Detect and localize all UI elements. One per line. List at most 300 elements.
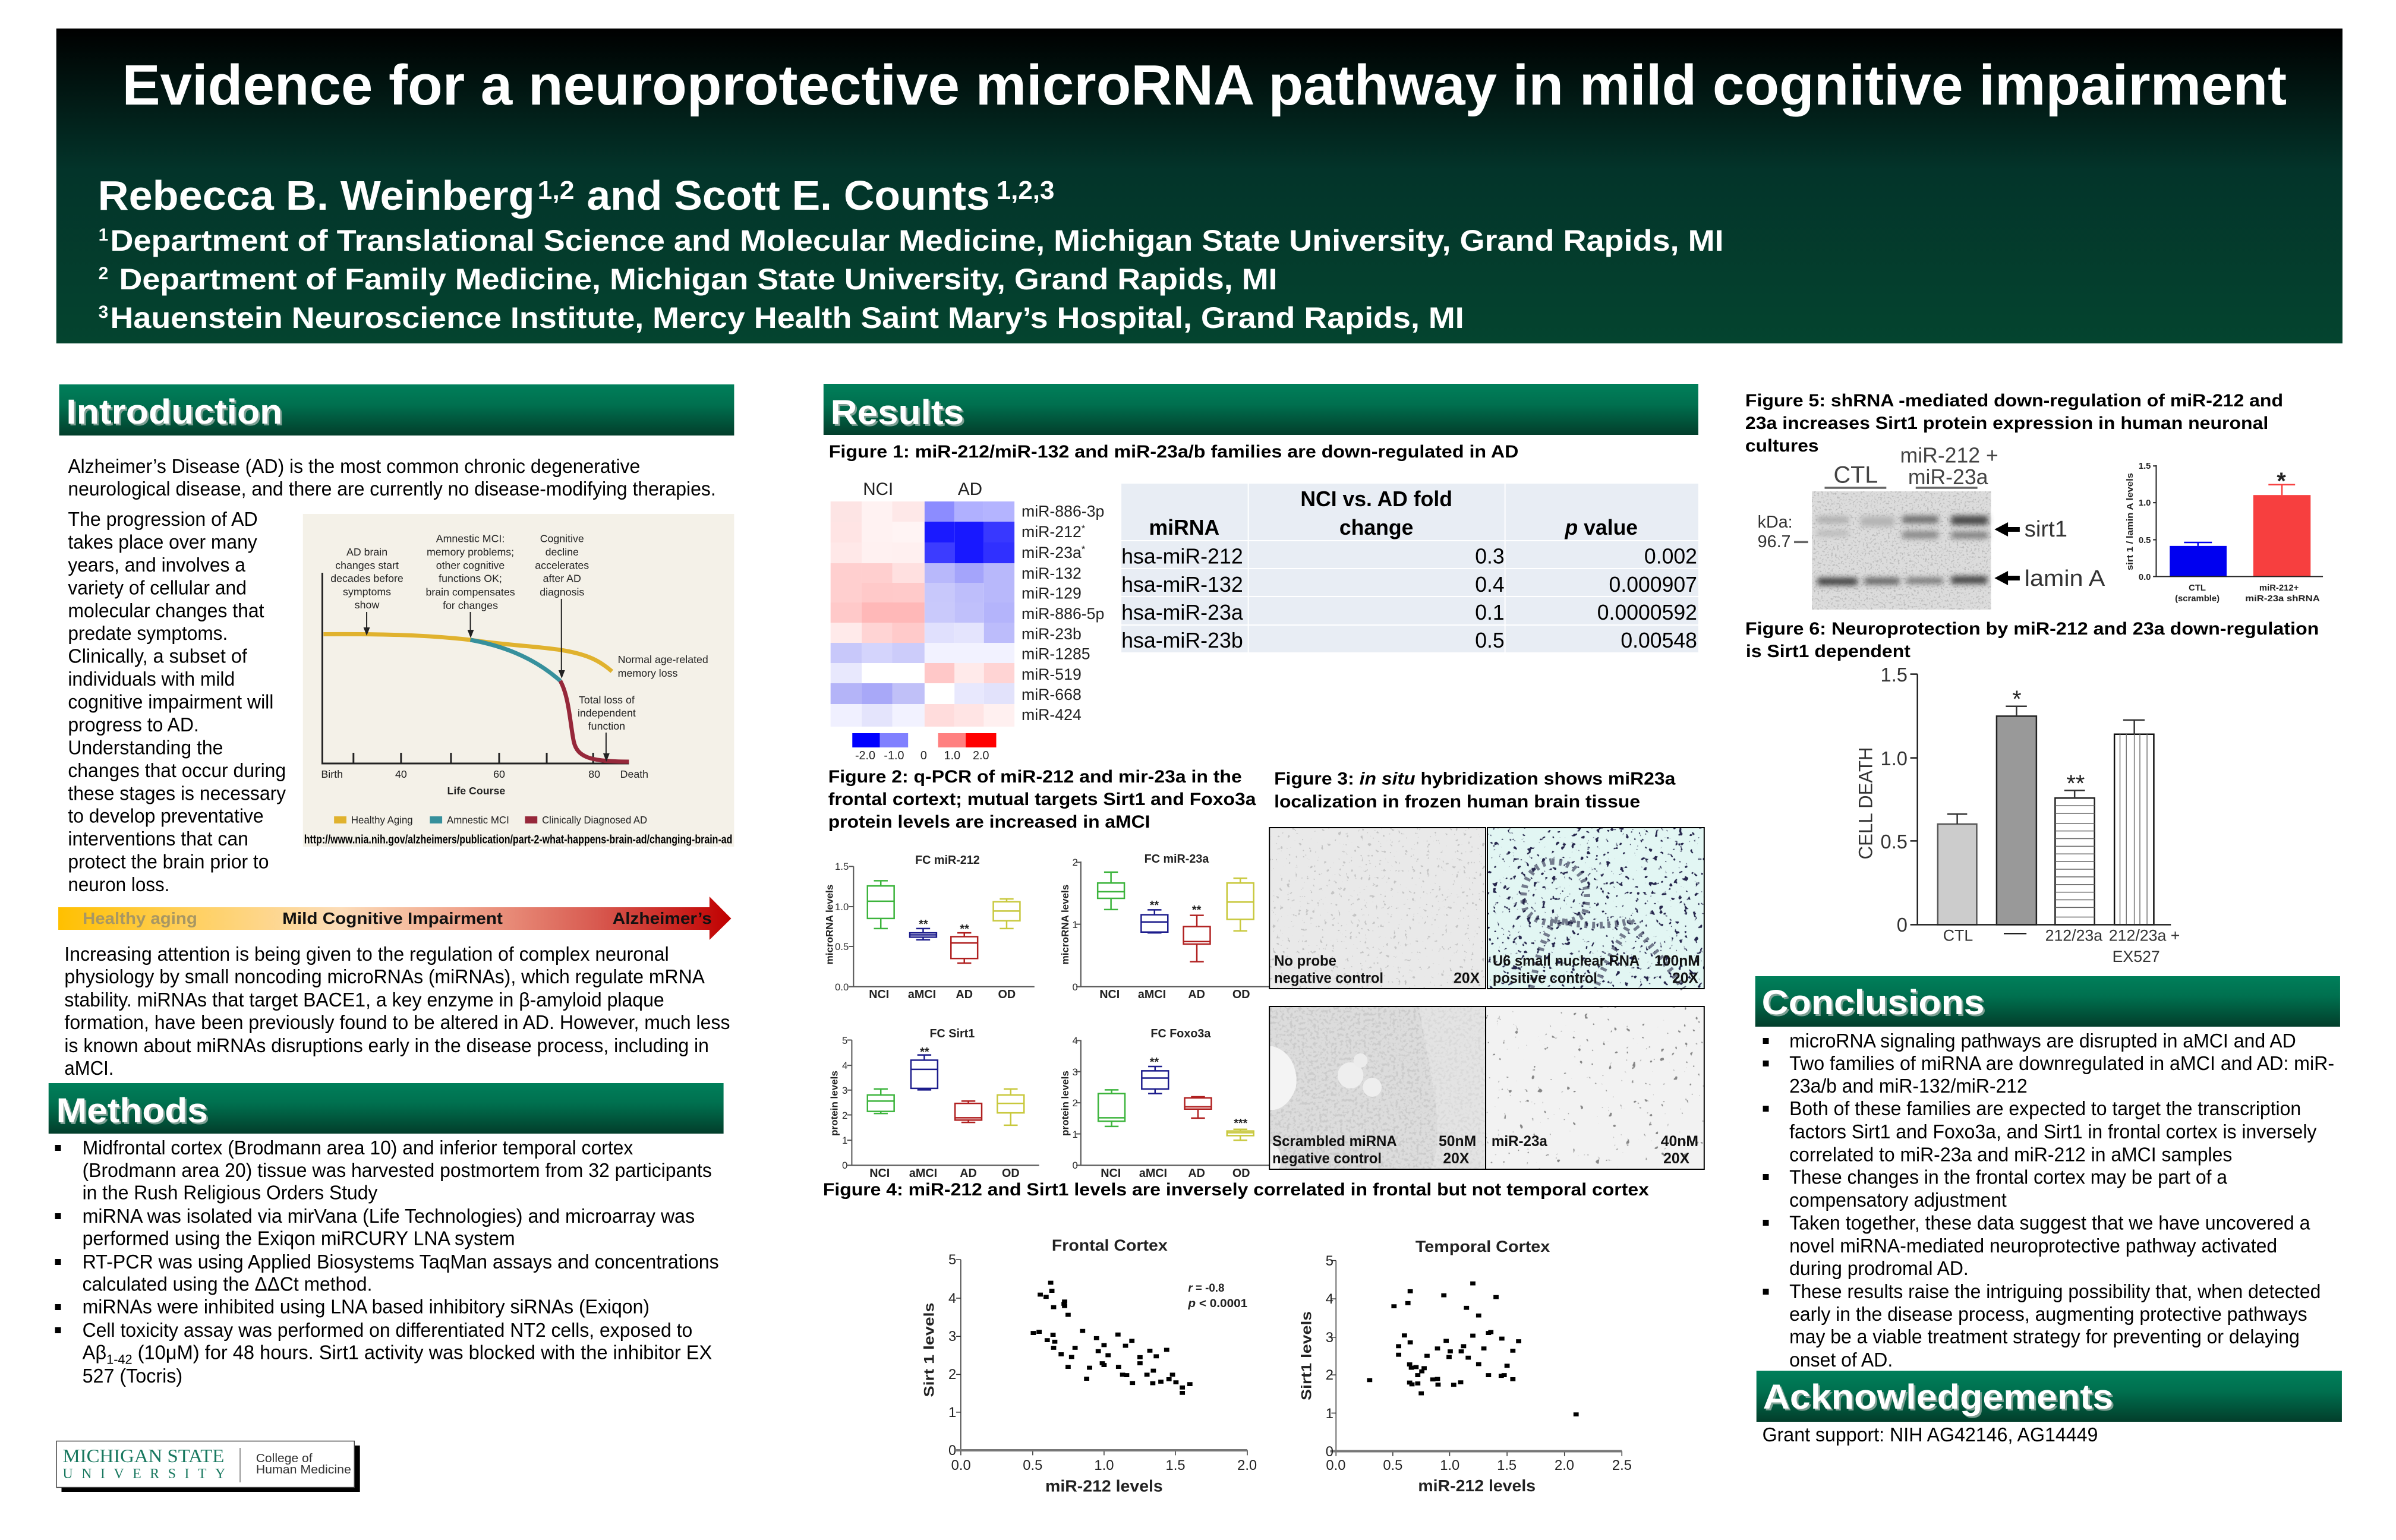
bar chart: sirt1 / lamin A levels: 0.0: [2139, 573, 2151, 582]
micrograph: scrambled miRNA: negative control: [1272, 1151, 1382, 1167]
table: fold change: 0.002: [1644, 544, 1697, 569]
scatter plot: frontal cortex: Sirt 1 levels: [922, 1302, 938, 1397]
chart: FC miR-212 boxplot: 1.0: [835, 901, 849, 913]
panel: conclusions: [1755, 976, 2340, 1371]
chart: FC miR-23a boxplot: AD: [1188, 988, 1205, 1001]
chart: life course memory decline: for changes: [443, 599, 498, 611]
list: methods bullets: Cell toxicity assay was performed on differentiated NT2 cells, exposed to: [83, 1319, 692, 1341]
text: progression column: neuron loss.: [68, 873, 169, 895]
chart: life course memory decline: memory loss: [618, 667, 677, 679]
text: intro paragraph 2: aMCI.: [64, 1057, 114, 1079]
logo: Michigan State University: College of: [256, 1452, 313, 1465]
text: intro paragraph 2: formation, have been previously found to be altered in AD. However, much less: [64, 1011, 730, 1033]
scatter plot: frontal cortex: 1.5: [1166, 1457, 1186, 1473]
bar chart: sirt1 / lamin A levels: (scramble): [2175, 594, 2220, 604]
chart: FC miR-212 boxplot: **: [919, 918, 928, 931]
bar chart: cell death: CTL: [1943, 926, 1973, 945]
list: conclusion bullets: Two families of miRNA are downregulated in aMCI and AD: miR-: [1789, 1052, 2334, 1074]
list: conclusion bullets: These changes in the frontal cortex may be part of a: [1789, 1166, 2228, 1188]
affiliations: Department of Family Medicine, Michigan State University, Grand Rapids, MI: [119, 263, 1278, 296]
chart: FC Foxo3a boxplot: ***: [1234, 1117, 1248, 1130]
scatter plot: temporal cortex: 2.5: [1612, 1457, 1632, 1473]
table: fold change: 0.0000592: [1597, 601, 1697, 624]
caption: figure 5: [1745, 391, 2283, 456]
chart: FC Sirt1 boxplot: 5: [842, 1035, 847, 1046]
title: Evidence for a neuroprotective microRNA pathway in mild cognitive impairment: [122, 53, 2287, 117]
list: conclusion bullets: during prodromal AD.: [1789, 1257, 1969, 1279]
chart: life course memory decline: Life Course: [447, 785, 505, 797]
chart: FC Foxo3a boxplot: OD: [1232, 1167, 1250, 1180]
chart: life course memory decline: diagnosis: [540, 586, 584, 598]
chart: FC Sirt1 boxplot: 0: [842, 1160, 847, 1171]
list: methods bullets: miRNAs were inhibited using LNA based inhibitory siRNAs (Exiqon): [83, 1295, 650, 1318]
authors: and Scott E. Counts: [587, 172, 990, 219]
scatter plot: temporal cortex: 4: [1326, 1291, 1333, 1307]
scatter plot: temporal cortex: [1299, 1238, 1632, 1495]
list: methods bullets: miRNA was isolated via mirVana (Life Technologies) and microarray was: [83, 1205, 695, 1227]
chart: FC miR-212 boxplot: aMCI: [908, 988, 936, 1001]
text: progression column: years, and involves a: [68, 554, 246, 576]
scatter plot: temporal cortex: 2: [1326, 1367, 1333, 1383]
statistics: p < 0.0001: [1187, 1298, 1247, 1310]
chart: FC Sirt1 boxplot: aMCI: [909, 1167, 937, 1180]
statistics: r = -0.8: [1188, 1282, 1224, 1295]
affiliations: [99, 224, 1724, 334]
arrow: disease progression: Healthy aging: [83, 909, 197, 927]
authors: 1,2: [538, 176, 575, 205]
table: fold change: hsa-miR-23b: [1121, 629, 1243, 652]
caption: figure 5: 23a increases Sirt1 protein expression in human neuronal: [1745, 414, 2268, 433]
table: fold change: 0.3: [1475, 544, 1505, 569]
text: progression column: protect the brain prior to: [68, 850, 269, 873]
chart: life course memory decline: Death: [620, 768, 648, 780]
panel: introduction: [58, 384, 734, 1079]
text: intro paragraph 2: physiology by small noncoding microRNAs (miRNAs), which regulate mRNA: [64, 965, 705, 987]
scatter plot: temporal cortex: Temporal Cortex: [1415, 1238, 1550, 1255]
chart: FC Foxo3a boxplot: 2: [1073, 1097, 1078, 1109]
bar chart: sirt1 / lamin A levels: *: [2277, 468, 2286, 494]
scatter plot: temporal cortex: 0.5: [1383, 1457, 1402, 1473]
legend: Clinically Diagnosed AD: [542, 814, 647, 826]
chart: life course memory decline: Cognitive: [540, 532, 584, 545]
bar chart: cell death: 0.5: [1881, 831, 1908, 853]
affiliations: Department of Translational Science and Molecular Medicine, Michigan State University, Grand Rapids, MI: [111, 224, 1724, 257]
chart: FC Foxo3a boxplot: aMCI: [1139, 1167, 1167, 1180]
list: methods bullets: Midfrontal cortex (Brodmann area 10) and inferior temporal cortex: [83, 1137, 633, 1159]
text: progression column: cognitive impairment will: [68, 690, 273, 713]
affiliations: Hauenstein Neuroscience Institute, Mercy Health Saint Mary’s Hospital, Grand Rapids, MI: [111, 301, 1464, 334]
text: grant support: Grant support: NIH AG42146, AG14449: [1763, 1424, 2098, 1446]
bar chart: cell death: CELL DEATH: [1855, 747, 1877, 859]
heading: methods: [49, 1083, 724, 1134]
bar chart: cell death: 212/23a: [2045, 926, 2102, 945]
table: fold change: hsa-miR-23a: [1121, 601, 1243, 624]
list: conclusion bullets: [1763, 1030, 2334, 1371]
list: conclusion bullets: Taken together, these data suggest that we have uncovered a: [1789, 1211, 2310, 1234]
chart: FC Foxo3a boxplot: **: [1150, 1056, 1159, 1069]
heading: methods: Methods: [56, 1092, 208, 1130]
heatmap colour legend: -2.0: [855, 749, 875, 762]
panel: acknowledgements: [1757, 1371, 2342, 1446]
text: progression column: individuals with mild: [68, 668, 235, 690]
chart: life course memory decline: Birth: [321, 768, 343, 780]
micrograph: scrambled miRNA: Scrambled miRNA: [1272, 1134, 1397, 1150]
arrow: disease progression: [58, 897, 731, 940]
table: fold change: 0.000907: [1609, 573, 1697, 597]
list: methods bullets: performed using the Exiqon miRCURY LNA system: [83, 1227, 515, 1249]
caption: figure 6: [1745, 619, 2319, 661]
scatter plot: frontal cortex: miR-212 levels: [1045, 1476, 1163, 1495]
scatter plot: frontal cortex: 1: [948, 1405, 956, 1421]
micrograph: miR-23a: [1486, 1006, 1704, 1169]
chart: FC miR-23a boxplot: 0: [1073, 982, 1078, 993]
chart: FC Sirt1 boxplot: protein levels: [829, 1071, 840, 1136]
list: methods bullets: 1-42: [106, 1352, 133, 1367]
legend: Healthy Aging: [351, 814, 413, 826]
chart: FC Foxo3a boxplot: FC Foxo3a: [1150, 1027, 1211, 1040]
scatter plot: temporal cortex: 1.5: [1497, 1457, 1517, 1473]
micrograph: U6 positive control: [1487, 828, 1704, 989]
chart: life course memory decline: Total loss of: [579, 694, 635, 706]
heading: conclusions: Conclusions: [1762, 984, 1985, 1022]
text: intro paragraph 2: [64, 943, 730, 1079]
scatter plot: frontal cortex: 2.0: [1237, 1457, 1257, 1473]
chart: life course memory decline: 60: [493, 768, 505, 780]
heatmap colour legend: 2.0: [973, 749, 989, 762]
chart: FC miR-212 boxplot: 0.0: [835, 982, 849, 993]
logo: Michigan State University: MICHIGAN STATE: [62, 1446, 224, 1466]
chart: FC Sirt1 boxplot: 4: [842, 1060, 847, 1071]
table: fold change: 0.1: [1475, 601, 1505, 624]
western blot: miR-212 +: [1900, 443, 1998, 468]
heatmap: figure 1: [831, 479, 1104, 762]
legend: [334, 814, 647, 826]
bar chart: cell death: EX527: [2113, 948, 2160, 965]
heatmap: figure 1: miR-23a: [1022, 544, 1082, 561]
logo: Michigan State University: [56, 1441, 360, 1492]
list: conclusion bullets: early in the disease process, augmenting protective pathways: [1789, 1303, 2307, 1325]
chart: FC Sirt1 boxplot: [829, 1027, 1039, 1180]
text: progression column: variety of cellular and: [68, 576, 247, 598]
text: progression column: takes place over many: [68, 531, 257, 553]
list: conclusion bullets: onset of AD.: [1789, 1349, 1893, 1371]
table: fold change: p value: [1565, 516, 1638, 539]
scatter plot: frontal cortex: 1.0: [1094, 1457, 1114, 1473]
bar chart: cell death: 1.0: [1881, 747, 1908, 769]
chart: life course memory decline: decades before: [330, 572, 403, 585]
affiliations: 1: [99, 225, 108, 245]
chart: FC miR-212 boxplot: FC miR-212: [915, 854, 980, 867]
text: progression column: changes that occur during: [68, 759, 286, 781]
scatter plot: temporal cortex: 0.0: [1326, 1457, 1345, 1473]
chart: life course memory decline: http://www.nia.nih.gov/alzheimers/publication/part-2-what-happens-brain-ad/changing-brain-ad: [304, 833, 732, 847]
chart: FC Foxo3a boxplot: 1: [1073, 1129, 1078, 1140]
chart: FC miR-212 boxplot: 1.5: [835, 861, 849, 872]
heatmap: figure 1: AD: [958, 479, 982, 499]
western blot: kDa:: [1758, 513, 1793, 532]
chart: life course memory decline: AD brain: [346, 546, 387, 558]
authors: 1,2,3: [997, 176, 1054, 205]
table: fold change: change: [1339, 516, 1413, 539]
table: fold change: [1121, 484, 1698, 652]
western blot: CTL: [1834, 462, 1878, 488]
bar chart: sirt1 / lamin A levels: [2126, 462, 2323, 604]
chart: FC miR-23a boxplot: 2: [1073, 857, 1078, 868]
heatmap colour legend: 1.0: [944, 749, 960, 762]
chart: life course memory decline: function: [588, 720, 625, 732]
chart: life course memory decline: decline: [546, 546, 579, 558]
list: methods bullets: calculated using the ΔΔCt method.: [83, 1273, 372, 1295]
heatmap: figure 1: NCI: [863, 479, 893, 499]
chart: FC Foxo3a boxplot: 4: [1073, 1035, 1078, 1046]
bar chart: cell death: **: [2066, 771, 2085, 797]
panel: figures 5 and 6: [1745, 391, 2323, 965]
micrograph: scrambled miRNA: [1269, 1006, 1486, 1169]
list: methods bullets: 527 (Tocris): [83, 1365, 182, 1387]
heading: introduction: [59, 384, 734, 436]
chart: FC miR-212 boxplot: [824, 854, 1035, 1001]
heading: results: Results: [831, 394, 964, 432]
scatter plot: temporal cortex: 0: [1326, 1444, 1333, 1460]
micrograph: miR-23a: miR-23a: [1492, 1134, 1547, 1150]
bar chart: cell death: [1855, 664, 2180, 965]
heatmap: figure 1: miR-132: [1022, 564, 1082, 582]
heatmap: figure 1: miR-23b: [1022, 625, 1082, 643]
list: conclusion bullets: may be a viable treatment strategy for preventing or delaying: [1789, 1326, 2300, 1348]
list: methods bullets: [55, 1137, 719, 1387]
chart: life course memory decline: [303, 514, 734, 847]
chart: life course memory decline: after AD: [543, 572, 581, 585]
arrow: disease progression: Mild Cognitive Impairment: [282, 909, 503, 927]
caption: figure 2: [828, 767, 1256, 832]
heading: acknowledgements: Acknowledgements: [1763, 1378, 2113, 1416]
chart: FC miR-23a boxplot: **: [1150, 899, 1159, 912]
micrograph: no probe: [1269, 828, 1486, 989]
text: intro paragraph 2: stability. miRNAs that target BACE1, a key enzyme in β-amyloid plaque: [64, 989, 664, 1011]
scatter plot: temporal cortex: miR-212 levels: [1418, 1476, 1536, 1495]
scatter plot: temporal cortex: 1.0: [1440, 1457, 1459, 1473]
table: fold change: 0.4: [1475, 573, 1505, 597]
heatmap: figure 1: *: [1082, 544, 1086, 555]
text: progression column: to develop preventative: [68, 805, 264, 827]
micrograph: no probe: No probe: [1274, 953, 1336, 969]
chart: life course memory decline: 80: [588, 768, 600, 780]
table: fold change: hsa-miR-212: [1121, 544, 1243, 569]
caption: figure 3: [1274, 769, 1676, 812]
text: progression column: [68, 508, 286, 895]
chart: FC Sirt1 boxplot: 1: [842, 1135, 847, 1146]
table: fold change: hsa-miR-132: [1121, 573, 1243, 597]
scatter plot: temporal cortex: 2.0: [1555, 1457, 1574, 1473]
chart: FC Foxo3a boxplot: 3: [1073, 1066, 1078, 1078]
chart: life course memory decline: brain compensates: [425, 586, 515, 598]
chart: life course memory decline: independent: [578, 707, 636, 719]
heatmap: figure 1: miR-519: [1022, 665, 1082, 683]
heatmap: figure 1: miR-1285: [1022, 645, 1090, 663]
heatmap: figure 1: miR-212: [1022, 523, 1082, 541]
scatter plot: frontal cortex: 0.5: [1023, 1457, 1042, 1473]
bar chart: cell death: 1.5: [1881, 664, 1908, 686]
scatter plot: temporal cortex: 5: [1326, 1253, 1333, 1269]
micrographs: figure 3: [1269, 828, 1704, 1169]
arrow: disease progression: Alzheimer’s: [613, 909, 712, 927]
heading: introduction: Introduction: [66, 393, 282, 431]
table: fold change: NCI vs. AD fold: [1300, 487, 1452, 511]
bar chart: cell death: *: [2012, 686, 2022, 712]
list: conclusion bullets: correlated to miR-23a and miR-212 in aMCI samples: [1789, 1143, 2232, 1166]
chart: life course memory decline: changes start: [335, 559, 399, 572]
bar chart: sirt1 / lamin A levels: miR-23a shRNA: [2245, 594, 2320, 604]
bar chart: sirt1 / lamin A levels: CTL: [2189, 583, 2206, 593]
text: progression column: these stages is necessary: [68, 782, 286, 804]
chart: FC Sirt1 boxplot: OD: [1002, 1167, 1020, 1180]
chart: life course memory decline: other cognitive: [436, 559, 505, 572]
chart: FC Sirt1 boxplot: 2: [842, 1110, 847, 1121]
affiliations: 2: [99, 264, 108, 283]
text: progression column: interventions that can: [68, 828, 248, 850]
heatmap colour legend: [852, 733, 996, 762]
text: intro paragraph 1: Alzheimer’s Disease (AD) is the most common chronic degenerative: [68, 455, 640, 477]
heatmap: figure 1: miR-129: [1022, 584, 1082, 602]
chart: FC Sirt1 boxplot: AD: [960, 1167, 977, 1180]
micrograph: miR-23a: 40nM: [1661, 1134, 1698, 1150]
chart: FC Sirt1 boxplot: NCI: [869, 1167, 890, 1180]
caption: figure 1: Figure 1: miR-212/miR-132 and miR-23a/b families are down-regulated in AD: [829, 442, 1518, 462]
scatter plot: temporal cortex: 1: [1326, 1406, 1333, 1422]
caption: figure 5: Figure 5: shRNA -mediated down-regulation of miR-212 and: [1745, 391, 2283, 411]
list: methods bullets: (Brodmann area 20) tissue was harvested postmortem from 32 participants: [83, 1159, 712, 1181]
text: progression column: Clinically, a subset of: [68, 645, 248, 667]
header banner: [56, 29, 2343, 343]
table: fold change: miRNA: [1149, 516, 1219, 539]
chart: FC miR-23a boxplot: OD: [1232, 988, 1250, 1001]
western blot: miR-23a: [1908, 465, 1988, 489]
text: intro paragraph 2: is known about miRNAs disruptions early in the disease process, including in: [64, 1034, 709, 1056]
chart: life course memory decline: Amnestic MCI:: [436, 532, 505, 545]
chart: life course memory decline: memory problems;: [427, 546, 514, 558]
scatter plot: frontal cortex: 0.0: [951, 1457, 971, 1473]
western blot: sirt1: [2025, 517, 2067, 542]
text: intro paragraph 1: [68, 455, 716, 500]
heatmap: figure 1: *: [1082, 523, 1086, 534]
caption: figure 2: protein levels are increased in aMCI: [828, 812, 1150, 832]
caption: figure 3: Figure 3: in situ hybridization shows miR23a: [1274, 769, 1676, 789]
chart: FC miR-212 boxplot: **: [960, 923, 969, 936]
bar chart: cell death: 0: [1897, 914, 1908, 936]
caption: figure 6: is Sirt1 dependent: [1746, 642, 1911, 661]
chart: FC miR-23a boxplot: aMCI: [1138, 988, 1166, 1001]
text: progression column: predate symptoms.: [68, 622, 228, 644]
text: intro paragraph 1: neurological disease, and there are currently no disease-modifying therapies.: [68, 478, 716, 500]
scatter plot: frontal cortex: Frontal Cortex: [1052, 1236, 1168, 1254]
logo: Michigan State University: Human Medicine: [256, 1463, 351, 1476]
chart: FC miR-212 boxplot: microRNA levels: [824, 885, 836, 964]
chart: FC miR-23a boxplot: 1: [1073, 919, 1078, 930]
list: conclusion bullets: These results raise the intriguing possibility that, when detected: [1789, 1280, 2321, 1302]
bar chart: cell death: 212/23a +: [2109, 926, 2180, 945]
heatmap: figure 1: miR-668: [1022, 686, 1082, 703]
chart: FC Sirt1 boxplot: 3: [842, 1085, 847, 1096]
list: conclusion bullets: microRNA signaling pathways are disrupted in aMCI and AD: [1789, 1030, 2296, 1052]
bar chart: sirt1 / lamin A levels: sirt 1 / lamin A levels: [2126, 473, 2135, 570]
chart: FC miR-23a boxplot: **: [1192, 904, 1202, 917]
micrograph: no probe: 20X: [1454, 970, 1480, 987]
scatter plot: frontal cortex: 4: [948, 1290, 956, 1307]
text: progression column: progress to AD.: [68, 714, 199, 736]
authors: Rebecca B. Weinberg: [98, 172, 535, 219]
chart: FC miR-23a boxplot: FC miR-23a: [1145, 853, 1209, 866]
micrograph: U6 positive control: 20X: [1672, 970, 1698, 987]
chart: life course memory decline: show: [355, 599, 379, 611]
chart: life course memory decline: symptoms: [343, 586, 391, 598]
scatter plot: frontal cortex: 0: [948, 1443, 956, 1459]
panel: methods: [49, 1083, 724, 1387]
heading: acknowledgements: [1757, 1371, 2342, 1422]
chart: FC Foxo3a boxplot: protein levels: [1060, 1071, 1071, 1136]
heatmap: figure 1: miR-886-5p: [1022, 605, 1104, 623]
caption: figure 2: Figure 2: q-PCR of miR-212 and mir-23a in the: [828, 767, 1242, 787]
list: methods bullets: RT-PCR was using Applied Biosystems TaqMan assays and concentrations: [83, 1251, 719, 1273]
chart: life course memory decline: accelerates: [535, 559, 589, 572]
scatter plot: frontal cortex: 2: [948, 1367, 956, 1383]
statistics: [1187, 1282, 1247, 1310]
panel: results: [823, 384, 1704, 1495]
authors: [98, 172, 1054, 219]
chart: life course memory decline: functions OK;: [439, 572, 502, 585]
list: conclusion bullets: compensatory adjustment: [1789, 1189, 2007, 1211]
text: progression column: The progression of AD: [68, 508, 258, 530]
chart: FC Foxo3a boxplot: NCI: [1101, 1167, 1121, 1180]
bar chart: sirt1 / lamin A levels: miR-212+: [2259, 583, 2299, 593]
micrograph: U6 positive control: U6 small nuclear RNA: [1493, 953, 1640, 969]
chart: FC miR-212 boxplot: OD: [998, 988, 1016, 1001]
chart: FC miR-212 boxplot: 0.5: [835, 941, 849, 952]
scatter plot: frontal cortex: 5: [948, 1252, 956, 1268]
micrograph: U6 positive control: positive control: [1493, 970, 1597, 987]
text: intro paragraph 2: Increasing attention is being given to the regulation of complex neuronal: [64, 943, 669, 965]
chart: FC Foxo3a boxplot: 0: [1073, 1160, 1078, 1171]
list: methods bullets: Aβ: [83, 1341, 106, 1364]
affiliations: 3: [99, 302, 108, 322]
text: progression column: molecular changes that: [68, 599, 264, 621]
heading: conclusions: [1755, 976, 2340, 1027]
chart: FC Foxo3a boxplot: AD: [1188, 1167, 1205, 1180]
chart: FC miR-212 boxplot: NCI: [869, 988, 889, 1001]
chart: FC Sirt1 boxplot: FC Sirt1: [929, 1027, 975, 1040]
scatter plot: frontal cortex: [922, 1236, 1257, 1495]
heatmap colour legend: 0: [920, 749, 927, 762]
list: conclusion bullets: 23a/b and miR-132/miR-212: [1789, 1075, 2028, 1097]
list: conclusion bullets: factors Sirt1 and Foxo3a, and Sirt1 in frontal cortex is inversely: [1789, 1121, 2317, 1143]
bar chart: sirt1 / lamin A levels: 0.5: [2139, 536, 2151, 545]
caption: figure 6: Figure 6: Neuroprotection by miR-212 and 23a down-regulation: [1745, 619, 2319, 639]
caption: figure 5: cultures: [1745, 436, 1819, 456]
caption: figure 4: Figure 4: miR-212 and Sirt1 levels are inversely correlated in frontal but not temporal cortex: [823, 1180, 1649, 1200]
chart: FC Foxo3a boxplot: [1060, 1027, 1269, 1180]
bar chart: sirt1 / lamin A levels: 1.5: [2139, 462, 2151, 471]
heading: results: [824, 384, 1698, 435]
caption: figure 2: frontal cortext; mutual targets Sirt1 and Foxo3a: [828, 790, 1256, 809]
chart: FC miR-23a boxplot: NCI: [1099, 988, 1120, 1001]
chart: life course memory decline: 40: [395, 768, 407, 780]
chart: life course memory decline: Normal age-related: [618, 654, 708, 665]
micrograph: scrambled miRNA: 20X: [1443, 1151, 1470, 1167]
scatter plot: temporal cortex: 3: [1326, 1330, 1333, 1346]
list: conclusion bullets: novel miRNA-mediated neuroprotective pathway activated: [1789, 1235, 2277, 1257]
legend: Amnestic MCI: [447, 814, 509, 826]
heatmap colour legend: -1.0: [884, 749, 904, 762]
micrograph: no probe: negative control: [1274, 970, 1383, 987]
